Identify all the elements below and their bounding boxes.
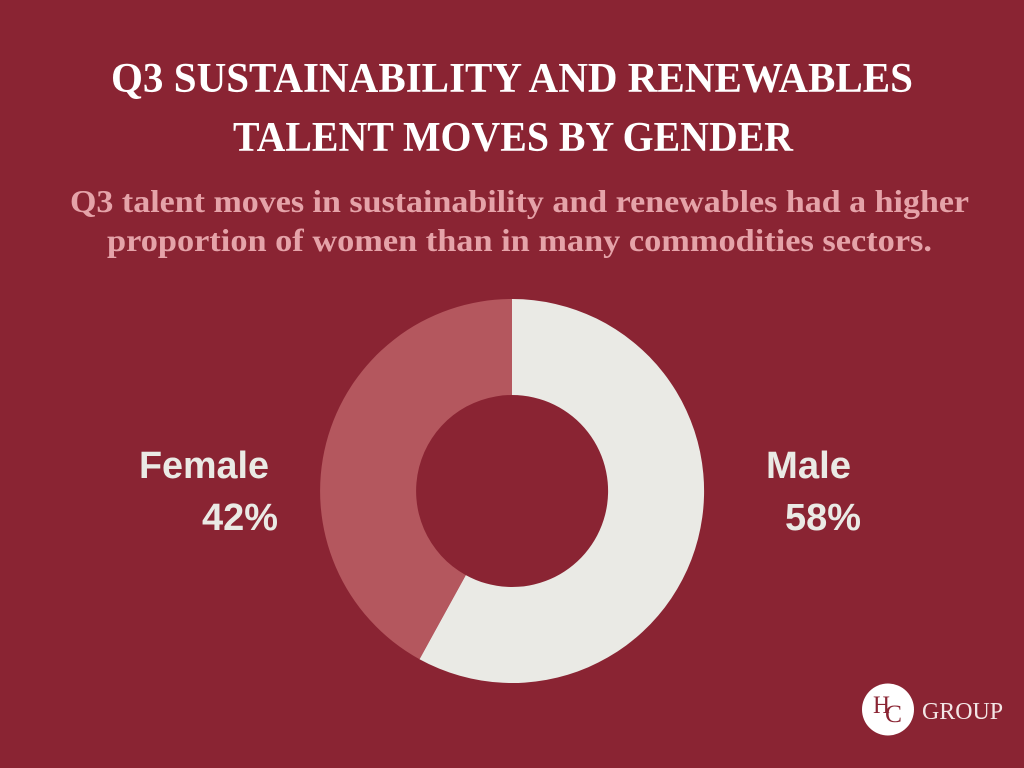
donut chart bbox=[320, 299, 704, 683]
subtitle text bbox=[70, 183, 969, 258]
subtitle text: proportion of women than in many commodities sectors. bbox=[107, 222, 932, 258]
subtitle text: Q3 talent moves in sustainability and renewables had a higher bbox=[70, 183, 969, 219]
logo monogram: C bbox=[885, 701, 902, 728]
label: female bbox=[139, 445, 278, 539]
logo monogram bbox=[873, 692, 902, 728]
segment: male 58% bbox=[420, 299, 704, 683]
title: TALENT MOVES BY GENDER bbox=[233, 115, 794, 161]
label: female: 42% bbox=[202, 497, 278, 539]
title bbox=[111, 56, 913, 161]
logo monogram: H bbox=[873, 692, 890, 719]
label: male: 58% bbox=[785, 497, 861, 539]
label: male: Male bbox=[766, 445, 851, 487]
label: female: Female bbox=[139, 445, 269, 487]
title: Q3 SUSTAINABILITY AND RENEWABLES bbox=[111, 56, 913, 102]
logo wordmark: GROUP bbox=[922, 699, 1003, 725]
logo: HC Group bbox=[862, 684, 1003, 736]
segment: female 42% bbox=[320, 299, 512, 659]
logo circle bbox=[862, 684, 914, 736]
label: male bbox=[766, 445, 861, 539]
